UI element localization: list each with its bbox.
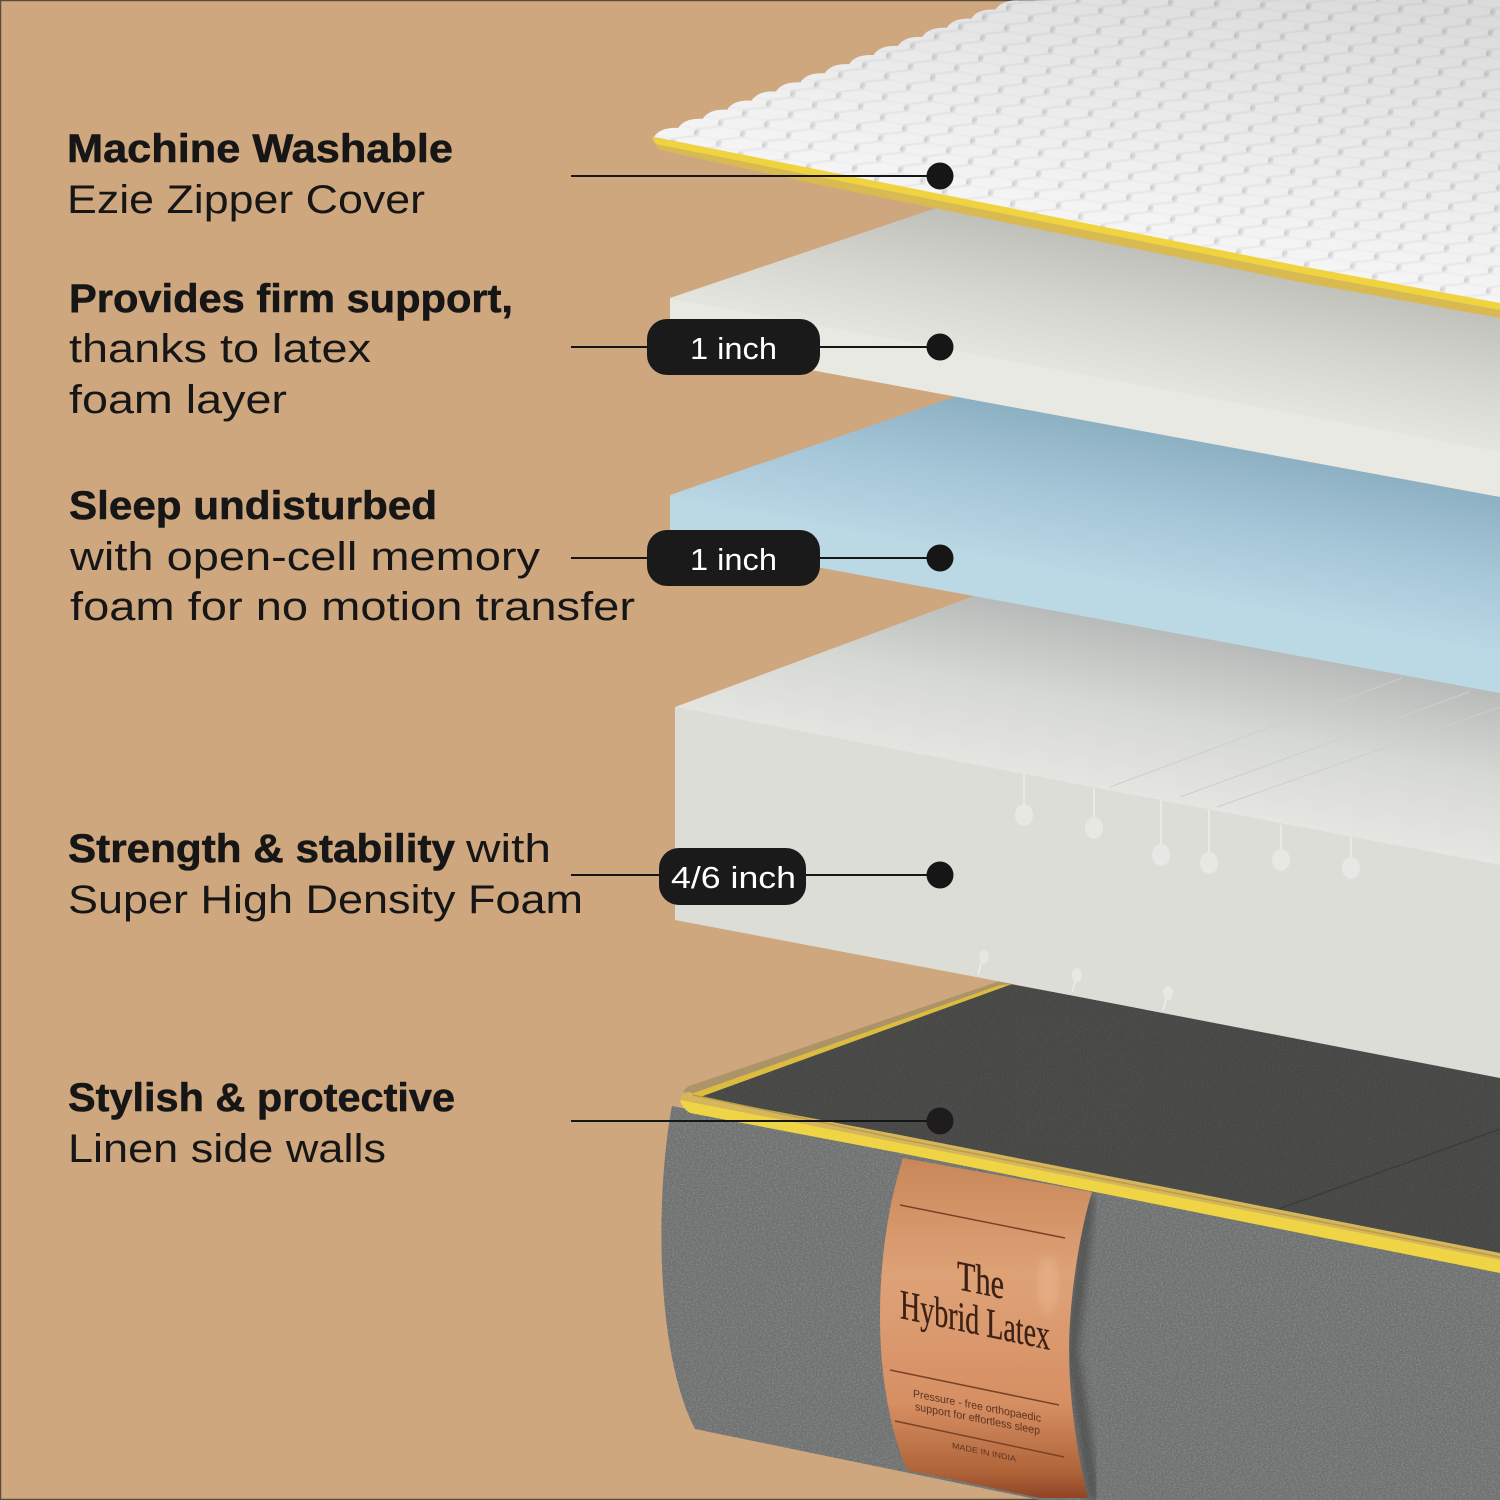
layer: zipper cover bbox=[640, 0, 1500, 320]
callout: firm support bbox=[69, 277, 954, 422]
label line: made in india: MADE IN INDIA bbox=[952, 1441, 1017, 1464]
description line 2: foam for no motion transfer bbox=[70, 585, 635, 629]
dot bbox=[926, 1108, 954, 1134]
label band bbox=[880, 1158, 1092, 1498]
callout: stylish and protective bbox=[68, 1076, 954, 1171]
description line 2: foam layer bbox=[69, 378, 287, 422]
leather label bbox=[880, 1158, 1092, 1498]
dot bbox=[926, 162, 954, 190]
leader line bbox=[571, 1120, 940, 1122]
label line: pressure: Pressure - free orthopaedic bbox=[913, 1388, 1041, 1425]
layer: latex foam bbox=[670, 205, 1500, 497]
layer: open-cell memory foam bbox=[670, 395, 1500, 693]
label rules bbox=[890, 1205, 1065, 1457]
pill: 1 inch bbox=[647, 530, 820, 586]
pill: 4/6 inch: 4/6 inch bbox=[671, 860, 796, 895]
foam top surface bbox=[675, 596, 1500, 865]
cover edge bright yellow bbox=[652, 137, 1500, 310]
leader line bbox=[571, 874, 940, 876]
cover quilted surface bbox=[640, 0, 1500, 320]
foam drip details bbox=[978, 773, 1360, 1010]
base back rim piping bbox=[683, 981, 1012, 1097]
heading suffix: with bbox=[465, 827, 551, 871]
latex front face bbox=[670, 298, 1500, 497]
foam side face bbox=[675, 707, 1500, 1078]
front piping yellow bbox=[680, 1092, 1500, 1273]
label line: support: support for effortless sleep bbox=[915, 1401, 1040, 1437]
linen side wall bbox=[650, 1100, 1500, 1500]
memory foam front face bbox=[670, 495, 1500, 693]
description: Ezie Zipper Cover bbox=[67, 178, 425, 222]
heading: Strength & stability bbox=[68, 827, 456, 871]
heading: Stylish & protective bbox=[68, 1076, 455, 1120]
callout: sleep undisturbed bbox=[69, 484, 953, 629]
pill: 4/6 inch bbox=[659, 848, 806, 905]
dot bbox=[926, 334, 954, 360]
label title: The: The bbox=[957, 1252, 1004, 1309]
heading: Machine Washable bbox=[67, 127, 453, 171]
pill: 1 inch: 1 inch bbox=[690, 542, 777, 577]
latex top surface bbox=[670, 205, 1500, 452]
layer: super high density foam bbox=[675, 596, 1500, 1078]
description line 1: thanks to latex bbox=[69, 327, 371, 371]
cover edge tan band bbox=[652, 140, 1500, 318]
dot bbox=[926, 544, 954, 572]
label title: Hybrid Latex: Hybrid Latex bbox=[900, 1281, 1050, 1360]
description line 1: with open-cell memory bbox=[69, 535, 540, 579]
base inner dark surface bbox=[702, 984, 1500, 1253]
leader line bbox=[571, 346, 940, 348]
description: Super High Density Foam bbox=[68, 878, 583, 922]
callout: strength and stability bbox=[68, 827, 954, 922]
foam channels bbox=[1110, 678, 1500, 807]
description: Linen side walls bbox=[68, 1127, 386, 1171]
pill: 1 inch: 1 inch bbox=[690, 331, 777, 366]
leader line bbox=[571, 557, 940, 559]
pill: 1 inch bbox=[647, 319, 820, 375]
label highlight bbox=[1038, 1255, 1058, 1315]
base layer: linen mattress base with label bbox=[650, 975, 1500, 1500]
leader line bbox=[571, 175, 940, 177]
heading: Provides firm support, bbox=[69, 277, 513, 321]
heading: Sleep undisturbed bbox=[69, 484, 437, 528]
dot bbox=[926, 862, 954, 888]
callout: machine washable bbox=[67, 127, 954, 222]
memory foam top surface bbox=[670, 395, 1500, 652]
